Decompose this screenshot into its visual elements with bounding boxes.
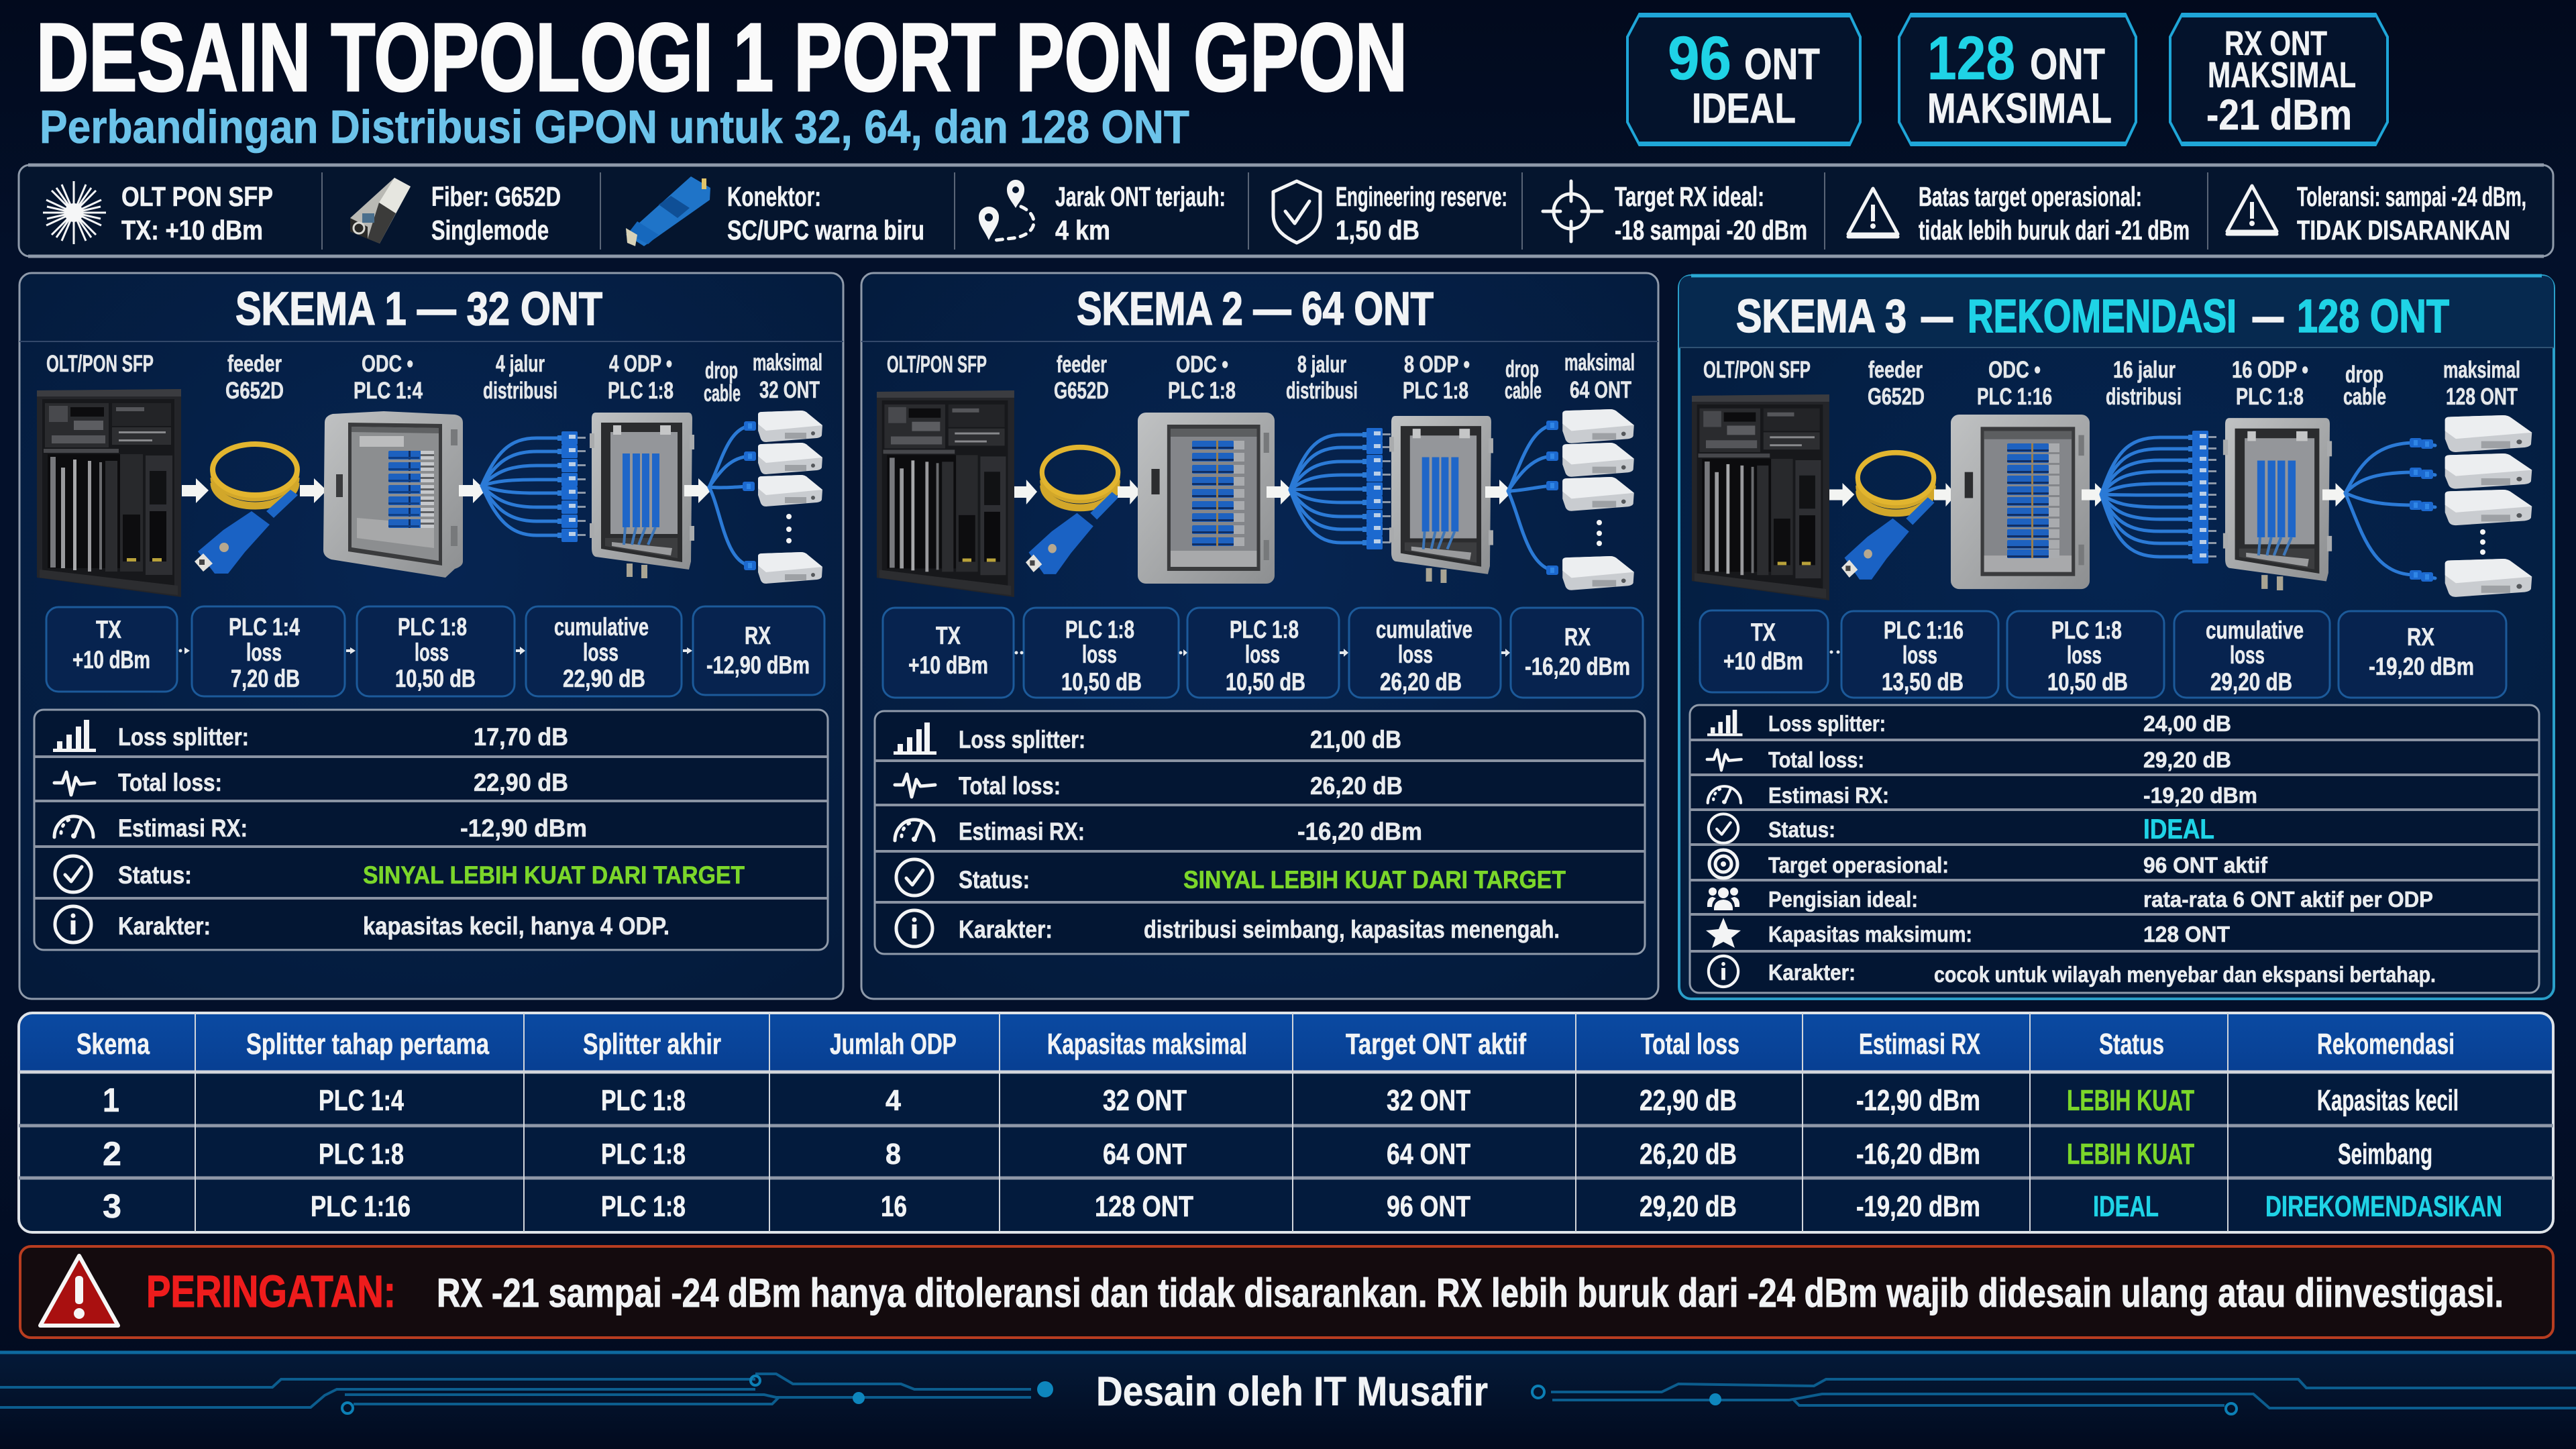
icon: target <box>1709 850 1737 878</box>
flow: RX <box>2339 611 2506 698</box>
flow: TX: +10 dBm <box>1723 647 1803 675</box>
rows: Loss splitter: <box>959 726 1085 753</box>
table row 1 <box>103 1081 2459 1119</box>
drop cables and ONTs <box>1508 409 1634 590</box>
title: DESAIN TOPOLOGI 1 PORT PON GPON <box>36 3 1407 111</box>
flow: PLC 1:8 second: 10,50 dB <box>1226 668 1305 696</box>
table row 1: Kapasitas kecil <box>2317 1084 2459 1117</box>
flow: PLC 1:8 first: 10,50 dB <box>1061 668 1142 696</box>
flow: PLC 1:8 <box>357 606 515 696</box>
flow: PLC 1:16: loss <box>1902 641 1937 669</box>
diagram labels: feeder <box>1868 357 1923 383</box>
rows: SINYAL LEBIH KUAT DARI TARGET <box>363 861 745 889</box>
arrow <box>2082 483 2107 506</box>
table header: Status <box>2099 1028 2164 1061</box>
distance text: 4 km <box>1055 215 1110 246</box>
device: ODC cabinet <box>1951 415 2090 589</box>
flow: TX: TX <box>1751 619 1776 646</box>
table row 3: PLC 1:16 <box>311 1190 411 1223</box>
flow arrows <box>178 647 692 655</box>
table row 3: 16 <box>881 1190 907 1223</box>
tolerance text <box>2297 181 2526 246</box>
flow: RX: RX <box>745 622 771 649</box>
table row 1: -12,90 dBm <box>1856 1084 1980 1117</box>
icon: warning triangle <box>1848 189 1898 237</box>
icon: SC connector <box>626 176 710 246</box>
rows: Karakter: <box>1768 960 1856 985</box>
diagram labels: PLC 1:8 <box>2236 384 2304 410</box>
rows: 96 ONT aktif <box>2143 853 2268 877</box>
drop cables and ONTs <box>709 411 822 584</box>
flow: cumulative: 22,90 dB <box>563 665 645 692</box>
table header: Total loss <box>1641 1028 1739 1061</box>
distance text <box>1055 181 1226 246</box>
heading: skema 3: 128 ONT <box>2297 290 2449 342</box>
icon: crosshair <box>1543 181 1602 241</box>
KPI badge: RX ONT maksimal <box>2170 14 2387 145</box>
table row 2: -16,20 dBm <box>1856 1138 1980 1171</box>
table row 2: 64 ONT <box>1103 1138 1187 1171</box>
device: ODP box <box>2223 418 2332 590</box>
flow: PLC 1:8 second <box>1187 608 1339 698</box>
diagram labels: feeder <box>227 351 282 377</box>
table row 2: 2 <box>103 1135 121 1173</box>
diagram labels: 8 jalur <box>1297 352 1346 378</box>
rows: 21,00 dB <box>1310 726 1401 753</box>
flow: cumulative: loss <box>583 639 619 666</box>
rows: 26,20 dB <box>1310 772 1403 800</box>
flow: TX <box>1700 610 1828 692</box>
heading: skema 3: — <box>1921 290 1953 342</box>
diagram labels <box>887 350 1635 404</box>
rows: 22,90 dB <box>474 769 568 796</box>
KPI badge: 128 ONT maksimal: 128 <box>1927 24 2015 93</box>
table row 3: 128 ONT <box>1095 1190 1193 1223</box>
target RX text <box>1615 181 1807 246</box>
flow: PLC 1:8: PLC 1:8 <box>398 613 467 641</box>
rows: Loss splitter: <box>1768 711 1886 736</box>
flow: PLC 1:16: 13,50 dB <box>1882 668 1964 696</box>
arrow <box>1267 480 1293 504</box>
panel: skema 1 <box>19 273 843 999</box>
header: main title and subtitle <box>36 3 1407 153</box>
reserve text <box>1336 181 1507 246</box>
diagram labels: cable <box>704 380 741 407</box>
arrow <box>1014 480 1037 504</box>
rows: Total loss: <box>959 772 1061 800</box>
rows <box>959 726 1566 943</box>
flow: cumulative: cumulative <box>554 613 649 641</box>
warning label: PERINGATAN: <box>146 1267 396 1317</box>
flow: TX: +10 dBm <box>908 651 988 679</box>
arrow <box>459 478 486 503</box>
flow: TX: +10 dBm <box>72 646 150 674</box>
diagram labels: cable <box>1505 378 1542 404</box>
rows: Karakter: <box>959 916 1053 943</box>
diagram labels: PLC 1:4 <box>354 378 423 404</box>
flow: cumulative <box>2174 611 2330 698</box>
flow arrows <box>1014 649 1510 657</box>
table row 2: PLC 1:8 <box>601 1138 686 1171</box>
device: ODP box <box>1389 416 1493 583</box>
diagram labels: PLC 1:8 <box>1403 378 1468 404</box>
arrow <box>1485 480 1512 504</box>
table row 3: -19,20 dBm <box>1856 1190 1980 1223</box>
flow: PLC 1:4: PLC 1:4 <box>229 613 300 641</box>
table row 2: Seimbang <box>2338 1138 2432 1171</box>
diagram labels: feeder <box>1057 352 1107 378</box>
flow: PLC 1:8 second: loss <box>1245 641 1280 668</box>
heading: skema 2: SKEMA 2 — 64 ONT <box>1077 282 1434 335</box>
flow: RX <box>1511 608 1643 698</box>
table header <box>76 1028 2455 1061</box>
icon: pulse <box>54 772 95 795</box>
flow: PLC 1:16 <box>1841 611 1998 698</box>
table row 2 <box>103 1135 2432 1173</box>
diagram labels <box>46 350 822 407</box>
table row 3: 29,20 dB <box>1640 1190 1737 1223</box>
flow arrow <box>1830 651 1839 653</box>
flow: PLC 1:8 second: PLC 1:8 <box>1230 616 1299 643</box>
target RX text: -18 sampai -20 dBm <box>1615 215 1807 246</box>
arrow <box>182 478 209 503</box>
rows: Estimasi RX: <box>1768 783 1889 808</box>
arrow <box>2322 483 2347 506</box>
icon: gauge <box>54 816 93 839</box>
table row 2: 26,20 dB <box>1640 1138 1737 1171</box>
table row 1: 4 <box>885 1084 901 1117</box>
heading: skema 1: SKEMA 1 — 32 ONT <box>235 282 602 335</box>
OLT text: OLT PON SFP <box>121 181 273 212</box>
arrow <box>1934 483 1956 506</box>
subtitle: Perbandingan Distribusi GPON untuk 32, 64, dan 128 ONT <box>40 101 1189 153</box>
flow: RX: RX <box>1564 623 1591 651</box>
rows: 24,00 dB <box>2143 711 2231 736</box>
KPI badge: RX ONT maksimal: RX ONT <box>2224 24 2327 62</box>
diagram labels <box>1703 357 2520 410</box>
diagram labels: 16 ODP • <box>2232 357 2308 383</box>
diagram labels: G652D <box>1054 378 1109 404</box>
icon: check <box>55 856 91 892</box>
distribution cables <box>1290 428 1391 549</box>
circuit traces left <box>0 1374 1053 1413</box>
diagram labels: G652D <box>225 378 284 404</box>
table row 3: DIREKOMENDASIKAN <box>2265 1190 2502 1223</box>
flow: TX: TX <box>936 622 961 649</box>
flow: PLC 1:4: loss <box>246 639 282 666</box>
OLT text: TX: +10 dBm <box>121 215 263 246</box>
flow: PLC 1:8 first: loss <box>1082 641 1117 668</box>
footer <box>0 1352 2576 1449</box>
diagram labels: 32 ONT <box>759 377 820 403</box>
table row 3: 96 ONT <box>1387 1190 1470 1223</box>
flow: TX: TX <box>96 616 121 643</box>
table header: Jumlah ODP <box>830 1028 957 1061</box>
icon: check <box>896 859 932 896</box>
diagram labels: ODC • <box>362 351 413 377</box>
rows: IDEAL <box>2143 813 2214 845</box>
heading: skema 3: REKOMENDASI <box>1968 290 2237 342</box>
fiber text: Fiber: G652D <box>431 181 561 212</box>
rows: kapasitas kecil, hanya 4 ODP. <box>363 912 669 940</box>
operational limit text: Batas target operasional: <box>1919 181 2142 212</box>
fiber text <box>431 181 561 246</box>
table header: Splitter tahap pertama <box>246 1028 489 1061</box>
table header: Estimasi RX <box>1859 1028 1980 1061</box>
diagram labels: G652D <box>1868 384 1925 410</box>
flow: RX: -19,20 dBm <box>2369 653 2474 680</box>
device: ODC cabinet <box>323 411 463 578</box>
panel: skema 2 <box>861 273 1658 999</box>
device: OLT rack <box>1692 394 1829 600</box>
rows: Status: <box>1768 817 1835 842</box>
diagram labels: distribusi <box>2106 384 2182 410</box>
flow: cumulative: cumulative <box>1376 616 1472 643</box>
table row 1: PLC 1:4 <box>319 1084 404 1117</box>
arrow <box>1118 480 1141 504</box>
diagram labels: OLT/PON SFP <box>1703 357 1811 383</box>
device: feeder fiber coil <box>1841 453 1935 580</box>
KPI badge: 96 ONT ideal: ONT <box>1744 39 1820 89</box>
rows: Loss splitter: <box>118 723 249 751</box>
diagram labels: cable <box>2343 384 2386 410</box>
table row 2: 8 <box>885 1138 901 1171</box>
KPI badge: RX ONT maksimal: MAKSIMAL <box>2208 55 2356 95</box>
table row 1: 1 <box>103 1081 119 1119</box>
flow: PLC 1:8: 10,50 dB <box>2047 668 2128 696</box>
rows: 128 ONT <box>2143 922 2230 947</box>
comparison table <box>19 1013 2553 1232</box>
icon: route pins <box>979 180 1034 240</box>
table row 1: 32 ONT <box>1103 1084 1187 1117</box>
KPI badge: 96 ONT ideal <box>1627 14 1860 145</box>
rows: Target operasional: <box>1768 853 1949 877</box>
table row 2: 64 ONT <box>1387 1138 1470 1171</box>
flow: RX: RX <box>2407 623 2434 651</box>
rows: 29,20 dB <box>2143 747 2231 772</box>
credit: Desain oleh IT Musafir <box>1096 1368 1488 1414</box>
tolerance text: TIDAK DISARANKAN <box>2297 215 2510 246</box>
KPI badge: 96 ONT ideal: 96 <box>1668 24 1731 93</box>
KPI badge: 128 ONT maksimal: MAKSIMAL <box>1927 85 2112 132</box>
diagram labels: PLC 1:16 <box>1977 384 2052 410</box>
rows: -19,20 dBm <box>2143 783 2257 808</box>
diagram labels: PLC 1:8 <box>1168 378 1236 404</box>
icon: info <box>55 906 91 943</box>
icon: warning triangle <box>40 1256 118 1326</box>
table row 1: PLC 1:8 <box>601 1084 686 1117</box>
KPI badge: RX ONT maksimal: -21 dBm <box>2206 91 2352 139</box>
flow: cumulative: loss <box>2230 641 2265 669</box>
flow: TX <box>883 608 1014 698</box>
connector text: SC/UPC warna biru <box>727 215 924 246</box>
arrow <box>684 478 711 503</box>
flow: PLC 1:16: PLC 1:16 <box>1884 616 1964 644</box>
detail table: skema 1 <box>34 710 828 950</box>
distribution cables <box>482 431 586 542</box>
diagram labels: ODC • <box>1176 352 1228 378</box>
rows: cocok untuk wilayah menyebar dan ekspansi bertahap. <box>1934 962 2436 987</box>
diagram labels: 8 ODP • <box>1404 352 1470 378</box>
rows: distribusi seimbang, kapasitas menengah. <box>1144 916 1560 943</box>
flow: RX <box>693 606 824 695</box>
rows: 17,70 dB <box>474 723 568 751</box>
flow: PLC 1:8 first <box>1024 608 1179 698</box>
heading: skema 3: — <box>2253 290 2284 342</box>
icon: gauge <box>895 820 934 842</box>
device: feeder fiber coil <box>1026 447 1119 574</box>
detail table: skema 3 <box>1690 705 2539 993</box>
device: feeder fiber coil <box>195 444 298 574</box>
diagram labels: drop <box>1505 356 1539 382</box>
warning banner <box>20 1246 2553 1338</box>
flow: cumulative: cumulative <box>2206 616 2304 644</box>
diagram labels: maksimal <box>753 350 822 376</box>
heading: skema 3 <box>1736 290 2449 342</box>
table row 3 <box>103 1187 2502 1225</box>
reserve text: Engineering reserve: <box>1336 181 1507 212</box>
flow: PLC 1:8: loss <box>2067 641 2102 669</box>
diagram labels: ODC • <box>1988 357 2041 383</box>
rows: Total loss: <box>1768 747 1864 772</box>
fiber text: Singlemode <box>431 215 549 246</box>
panel: skema 3 rekomendasi <box>1679 276 2554 999</box>
rows: Estimasi RX: <box>959 818 1085 845</box>
rows: SINYAL LEBIH KUAT DARI TARGET <box>1183 866 1566 894</box>
flow: cumulative <box>1349 608 1501 698</box>
diagram labels: drop <box>2345 362 2383 388</box>
flow: cumulative: 29,20 dB <box>2210 668 2292 696</box>
icon: bars <box>53 720 96 752</box>
OLT text <box>121 181 273 246</box>
arrow <box>1829 483 1854 506</box>
diagram labels: OLT/PON SFP <box>887 352 987 378</box>
operational limit text <box>1919 181 2190 246</box>
KPI badge: 128 ONT maksimal <box>1899 14 2136 145</box>
rows: Estimasi RX: <box>118 814 248 842</box>
diagram labels: PLC 1:8 <box>608 378 674 404</box>
table header: Kapasitas maksimal <box>1047 1028 1247 1061</box>
flow: cumulative: loss <box>1398 641 1433 668</box>
diagram labels: distribusi <box>1286 378 1358 404</box>
rows: rata-rata 6 ONT aktif per ODP <box>2143 887 2433 912</box>
heading: skema 3: SKEMA 3 <box>1736 290 1907 342</box>
connector text <box>727 181 924 246</box>
drop cables and ONTs <box>2345 415 2532 597</box>
diagram labels: 128 ONT <box>2446 384 2518 410</box>
icon: gauge <box>1708 786 1741 804</box>
flow: PLC 1:4: 7,20 dB <box>231 665 300 692</box>
table header: Skema <box>76 1028 150 1061</box>
flow: PLC 1:4 <box>192 606 345 696</box>
flow: RX: -12,90 dBm <box>706 651 810 679</box>
arrow <box>300 478 327 503</box>
reserve text: 1,50 dB <box>1336 215 1419 246</box>
flow: PLC 1:8: PLC 1:8 <box>2051 616 2122 644</box>
flow: cumulative <box>526 606 682 696</box>
diagram labels: drop <box>705 358 738 384</box>
rows: -12,90 dBm <box>460 814 587 842</box>
diagram labels: distribusi <box>483 378 557 404</box>
operational limit text: tidak lebih buruk dari -21 dBm <box>1919 215 2190 246</box>
icon: pulse <box>895 774 935 797</box>
rows: Status: <box>118 861 192 889</box>
diagram labels: maksimal <box>1564 350 1635 376</box>
table row 2: LEBIH KUAT <box>2067 1138 2194 1171</box>
rows <box>1768 711 2436 987</box>
table row 2: PLC 1:8 <box>319 1138 404 1171</box>
diagram labels: 16 jalur <box>2113 357 2176 383</box>
flow: PLC 1:8: loss <box>415 639 449 666</box>
table header: Splitter akhir <box>583 1028 721 1061</box>
rows: Total loss: <box>118 769 222 796</box>
KPI badge: 128 ONT maksimal: ONT <box>2030 39 2105 89</box>
target RX text: Target RX ideal: <box>1615 181 1764 212</box>
rows <box>118 723 745 940</box>
icon: SFP module <box>350 178 411 244</box>
table header: Target ONT aktif <box>1346 1028 1526 1061</box>
flow: PLC 1:8 first: PLC 1:8 <box>1065 616 1134 643</box>
icon: star <box>1706 918 1741 948</box>
table row 1: 22,90 dB <box>1640 1084 1737 1117</box>
table row 3: 3 <box>103 1187 121 1225</box>
icon: warning triangle 2 <box>2227 186 2277 234</box>
flow: RX: -16,20 dBm <box>1525 653 1630 680</box>
rows: Status: <box>959 866 1030 894</box>
device: OLT rack <box>37 389 181 597</box>
table row 1: LEBIH KUAT <box>2067 1084 2194 1117</box>
flow: cumulative: 26,20 dB <box>1380 668 1462 696</box>
diagram labels: 4 ODP • <box>609 351 672 377</box>
flow: TX <box>46 607 177 692</box>
table row 1: 32 ONT <box>1387 1084 1470 1117</box>
table row 3: IDEAL <box>2093 1190 2159 1223</box>
icon: info <box>896 910 932 947</box>
table row 3: PLC 1:8 <box>601 1190 686 1223</box>
rows: Pengisian ideal: <box>1768 887 1918 912</box>
info bar: equipment and targets <box>19 165 2553 256</box>
icon: bars <box>1707 710 1742 736</box>
icon: info <box>1709 956 1738 987</box>
diagram labels: maksimal <box>2443 357 2520 383</box>
rows: Kapasitas maksimum: <box>1768 922 1972 947</box>
icon: check <box>1709 814 1738 843</box>
icon: bars <box>894 722 936 755</box>
icon: shield check <box>1273 181 1320 243</box>
diagram labels: 64 ONT <box>1570 377 1631 403</box>
flow: PLC 1:8 <box>2007 611 2164 698</box>
device: ODC cabinet <box>1138 413 1275 584</box>
detail table: skema 2 <box>875 711 1645 954</box>
icon: people <box>1707 888 1739 910</box>
distance text: Jarak ONT terjauh: <box>1055 181 1226 212</box>
icon: laser star <box>43 181 106 244</box>
distribution cables <box>2101 431 2216 564</box>
KPI badge: 96 ONT ideal: IDEAL <box>1692 85 1796 132</box>
device: ODP box <box>590 413 694 578</box>
icon: pulse <box>1707 750 1741 770</box>
rows: -16,20 dBm <box>1297 818 1422 845</box>
rows: Karakter: <box>118 912 211 940</box>
diagram labels: OLT/PON SFP <box>46 351 154 377</box>
circuit traces right <box>1532 1379 2576 1414</box>
diagram labels: 4 jalur <box>496 351 545 377</box>
flow: PLC 1:8: 10,50 dB <box>395 665 476 692</box>
device: OLT rack <box>877 390 1014 597</box>
connector text: Konektor: <box>727 181 821 212</box>
table header: Rekomendasi <box>2317 1028 2455 1061</box>
